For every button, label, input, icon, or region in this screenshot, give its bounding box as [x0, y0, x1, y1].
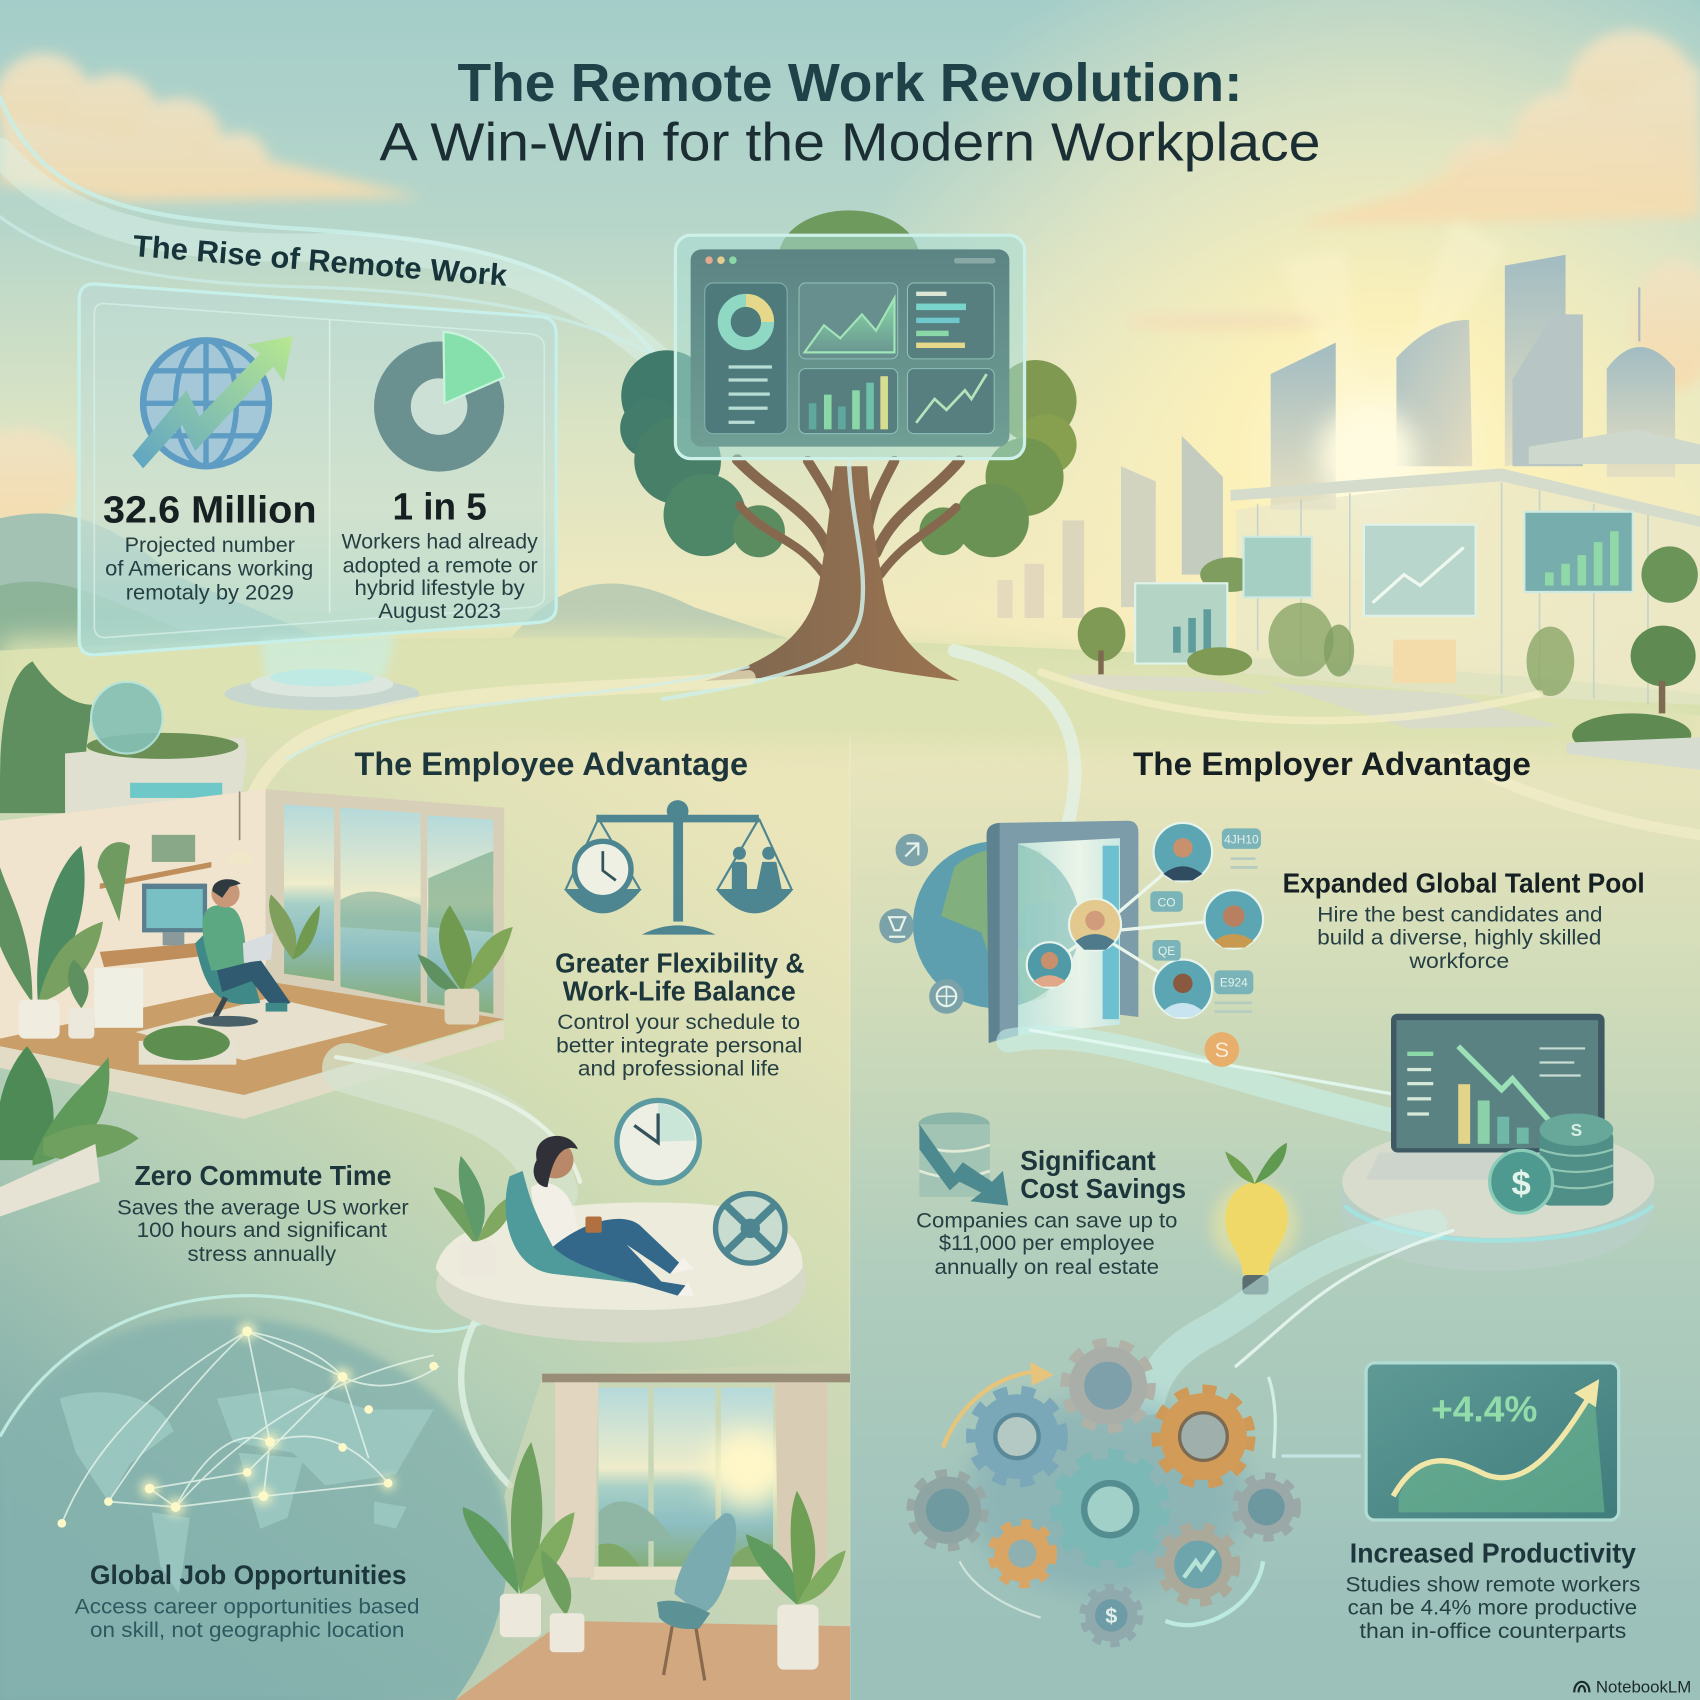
seam: [849, 737, 851, 1700]
text: increased productivity: than in-office counterparts: [1360, 1618, 1626, 1643]
stat: 1 in 5: 1 in 5: [392, 486, 487, 528]
potted plant: [434, 1156, 518, 1276]
talent pool illustration: [879, 821, 1263, 1043]
clouds right: [1122, 30, 1700, 390]
arrow to chart: [1282, 1455, 1361, 1458]
hologram pedestal: [224, 634, 420, 710]
gear: right small: [1237, 1478, 1296, 1536]
glass panel: [79, 284, 556, 655]
doorway: [987, 821, 1138, 1043]
gear: lower right: [1162, 1529, 1234, 1600]
world map network: [57, 1322, 439, 1594]
text: global job opportunities: Global Job Opportunities: [90, 1559, 407, 1590]
stat: 1 in 5: August 2023: [378, 598, 501, 623]
text: increased productivity: Studies show remote workers: [1345, 1572, 1641, 1597]
network lines: [62, 1331, 439, 1523]
icon: crossed-out steering wheel: [716, 1194, 785, 1263]
text: greater flexibility: and professional life: [578, 1056, 780, 1081]
small orbit icons: [879, 834, 964, 1014]
tag lines: [1214, 859, 1258, 1012]
winding path: [336, 1057, 580, 1485]
home office scene: [0, 661, 513, 1119]
tree stream: [661, 461, 863, 699]
text: greater flexibility: Greater Flexibility &: [555, 947, 804, 979]
tree canopy: [620, 210, 1077, 557]
sun glow: [813, 0, 1700, 1019]
person at laptop: [195, 879, 291, 1027]
clouds left: [0, 53, 423, 526]
heading: rise of remote work: The Rise of Remote Work: [132, 230, 508, 293]
stat: 32.6 million: [103, 490, 317, 605]
ground blend: [0, 631, 1700, 759]
stat: 32.6 million: Projected number: [125, 532, 295, 557]
gear: grey left: [913, 1476, 982, 1545]
text: increased productivity: can be 4.4% more productive: [1348, 1594, 1637, 1619]
tag labels: CO: [1158, 895, 1176, 909]
text: expanded global talent pool: Expanded Global Talent Pool: [1283, 866, 1645, 898]
gear cluster: [913, 1345, 1296, 1643]
window panes: [591, 1388, 787, 1580]
heading: employee advantage: The Employee Advantage: [355, 746, 748, 782]
text: greater flexibility: better integrate personal: [556, 1033, 802, 1058]
stat: 32.6 million: remotaly by 2029: [126, 580, 294, 605]
text: increased productivity: Increased Productivity: [1350, 1536, 1636, 1568]
node glow: [140, 1322, 396, 1517]
right lower background: [850, 672, 1700, 1700]
glow arc over map: [0, 1296, 564, 1437]
text: significant cost savings: Significant: [1020, 1144, 1156, 1176]
floating screens: [1135, 512, 1633, 664]
gear: orange: [1159, 1392, 1248, 1481]
corner planter: [0, 1046, 139, 1216]
tag labels: E924: [1220, 976, 1248, 990]
icon: donut chart: [392, 332, 504, 453]
left lower background: [0, 672, 850, 1700]
text: zero commute time: 100 hours and significant: [137, 1217, 387, 1242]
gear: central teal: [1058, 1457, 1162, 1561]
title: [379, 53, 1321, 172]
window: [284, 804, 493, 1014]
laptop on platform: [1342, 1014, 1654, 1271]
chair: [657, 1513, 736, 1680]
desk: [94, 835, 221, 1028]
gear: small orange: [993, 1524, 1052, 1583]
text: significant cost savings: Companies can save up to: [916, 1207, 1177, 1232]
text: greater flexibility: Control your schedule to: [557, 1009, 800, 1034]
network nodes: [57, 1326, 438, 1528]
floor: [0, 981, 504, 1095]
dashboard screen: [675, 235, 1025, 459]
trees and planters: [1068, 607, 1700, 770]
map landmass: [60, 1388, 434, 1594]
city skyline: [997, 255, 1700, 770]
text: significant cost savings: $11,000 per employee: [939, 1230, 1155, 1255]
room walls: [0, 789, 266, 1039]
curtains: [555, 1382, 598, 1577]
tree: [620, 210, 1077, 699]
icon: wall clock: [617, 1100, 699, 1183]
icon: lightbulb with sprout: [1211, 1143, 1298, 1295]
icon: globe with arrow: [132, 336, 293, 468]
stat: 32.6 million: of Americans working: [105, 556, 313, 581]
text: greater flexibility: Work-Life Balance: [563, 975, 796, 1007]
relaxing person on platform: [434, 1136, 806, 1342]
stat: 1 in 5: adopted a remote or: [343, 552, 538, 577]
tags: [1150, 828, 1261, 994]
text: significant cost savings: [916, 1144, 1186, 1279]
dollar coin in stream: S: [1215, 1037, 1229, 1062]
tag labels: 4JH10: [1224, 832, 1259, 846]
text: zero commute time: Zero Commute Time: [134, 1159, 391, 1191]
background sky: [0, 0, 1700, 759]
text: global job opportunities: [75, 1559, 420, 1642]
text: significant cost savings: annually on real estate: [935, 1254, 1159, 1279]
portraits: [1027, 823, 1263, 1018]
heading: employer advantage: The Employer Advantage: [1133, 746, 1531, 782]
gear: dollar: [1084, 1588, 1138, 1643]
text: global job opportunities: on skill, not geographic location: [90, 1617, 404, 1642]
text: increased productivity: [1345, 1536, 1641, 1643]
globe: [913, 841, 1080, 1008]
text: expanded global talent pool: workforce: [1408, 948, 1509, 973]
stat: 1 in 5: [342, 486, 538, 623]
dollar coin in stream: [1205, 1032, 1239, 1067]
plants: [463, 1442, 846, 1670]
text: expanded global talent pool: [1283, 866, 1645, 973]
tag labels: [1158, 832, 1259, 990]
text: zero commute time: Saves the average US worker: [117, 1194, 409, 1219]
icon: database with down arrow: [918, 1112, 1008, 1206]
sun rays: [1279, 217, 1507, 455]
gear: grey top: [1068, 1345, 1148, 1426]
text: expanded global talent pool: Hire the best candidates and: [1317, 902, 1602, 927]
platform: [1342, 1125, 1654, 1271]
glass office building: [1200, 429, 1700, 705]
plants: [0, 842, 513, 1065]
title: A Win-Win for the Modern Workplace: [379, 112, 1321, 172]
glowing stream top left: [0, 98, 661, 363]
mountains: [0, 513, 791, 661]
coins: [1490, 1113, 1613, 1213]
coins: S: [1571, 1120, 1582, 1140]
value label: +4.4%: [1431, 1389, 1537, 1429]
productivity chart card: [1366, 1363, 1619, 1520]
flow lines from tree: [244, 651, 1700, 835]
tag labels: QE: [1158, 944, 1175, 958]
gear: dollar: $: [1105, 1603, 1117, 1628]
icon: balance scale: [564, 800, 794, 935]
notebooklm logo: NotebookLM: [1596, 1678, 1691, 1696]
stat: 1 in 5: Workers had already: [342, 529, 538, 554]
text: zero commute time: stress annually: [188, 1241, 336, 1266]
tree trunk: [705, 466, 960, 681]
stream from door to laptop: [1008, 1030, 1399, 1122]
coins: $: [1511, 1165, 1531, 1203]
left teal pool for the map: [0, 1317, 512, 1700]
tree branches: [737, 460, 960, 575]
text: greater flexibility: [555, 947, 804, 1081]
panel: the rise of remote work: [79, 230, 556, 710]
text: zero commute time: [117, 1159, 409, 1266]
text: global job opportunities: Access career opportunities based: [75, 1593, 420, 1618]
rooftop planter: [0, 661, 247, 813]
text: significant cost savings: Cost Savings: [1020, 1172, 1186, 1204]
window room scene: [455, 1361, 850, 1700]
gear: blue: [974, 1393, 1060, 1480]
stat: 32.6 million: 32.6 Million: [103, 490, 317, 532]
stat: 1 in 5: hybrid lifestyle by: [355, 575, 525, 600]
stream to gears: [1149, 1225, 1453, 1399]
title: The Remote Work Revolution:: [458, 53, 1242, 113]
ground: [0, 638, 1700, 781]
connection lines: [1049, 857, 1234, 987]
text: expanded global talent pool: build a diverse, highly skilled: [1317, 924, 1601, 949]
laptop screen: [1366, 1014, 1605, 1180]
floor: [455, 1621, 850, 1700]
